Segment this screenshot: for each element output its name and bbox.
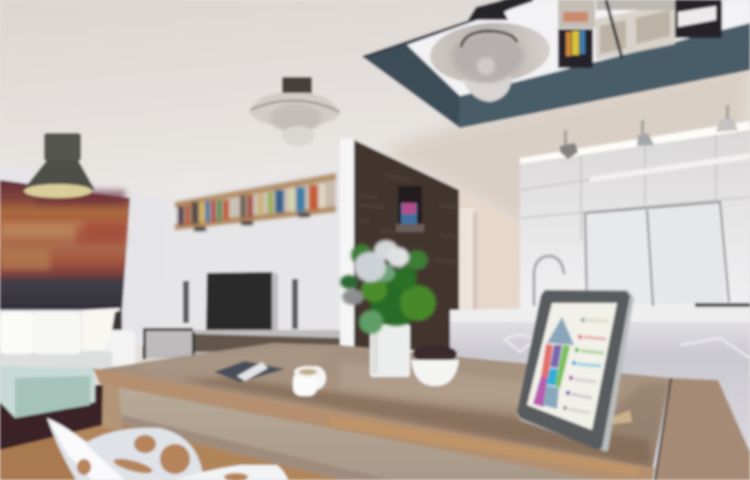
upper floor shelf: [558, 0, 722, 68]
front wood lip: [93, 368, 655, 480]
tablet stand: [608, 410, 632, 425]
speakers: [183, 281, 189, 323]
tablet: [517, 290, 634, 451]
bookshelf: [175, 173, 336, 231]
white chair: [47, 418, 288, 480]
ceiling light strips: [520, 121, 750, 182]
floor: [0, 420, 300, 480]
ceiling: [0, 0, 750, 240]
track spot lights: [560, 105, 738, 159]
table: [93, 343, 750, 480]
magazines: [214, 361, 285, 382]
skylight opening: [363, 0, 750, 128]
right plank: [655, 378, 750, 480]
table leg: [102, 378, 124, 430]
house icon on screen: [533, 317, 574, 409]
tablet screen: [527, 303, 617, 430]
rug: [0, 385, 103, 450]
hallway wall: [459, 190, 522, 312]
media console: [143, 328, 340, 359]
coffee cup: [293, 366, 326, 396]
list on screen: [563, 318, 608, 413]
tv: [206, 272, 272, 331]
white column: [340, 139, 354, 351]
left pendant lamp: [23, 133, 95, 198]
glass coffee table: [0, 366, 95, 418]
table top: [93, 343, 670, 472]
white sofa: [0, 308, 135, 375]
far wall with shelf and tv: [143, 165, 342, 359]
kitchen cabinets: [520, 125, 750, 312]
kitchen counter: [450, 303, 750, 480]
plant: [340, 240, 436, 334]
bowl of dark berries: [411, 345, 459, 386]
faucet: [534, 256, 564, 306]
left back wall: [0, 165, 170, 345]
wall niche: [398, 186, 422, 226]
vase: [370, 324, 410, 377]
plank shading: [140, 348, 668, 465]
middle pendant lamp: [250, 77, 340, 146]
painting on left wall: [0, 180, 130, 310]
dark brick wall: [354, 140, 459, 350]
table front face: [118, 380, 655, 480]
large pendant lamp: [428, 0, 552, 102]
